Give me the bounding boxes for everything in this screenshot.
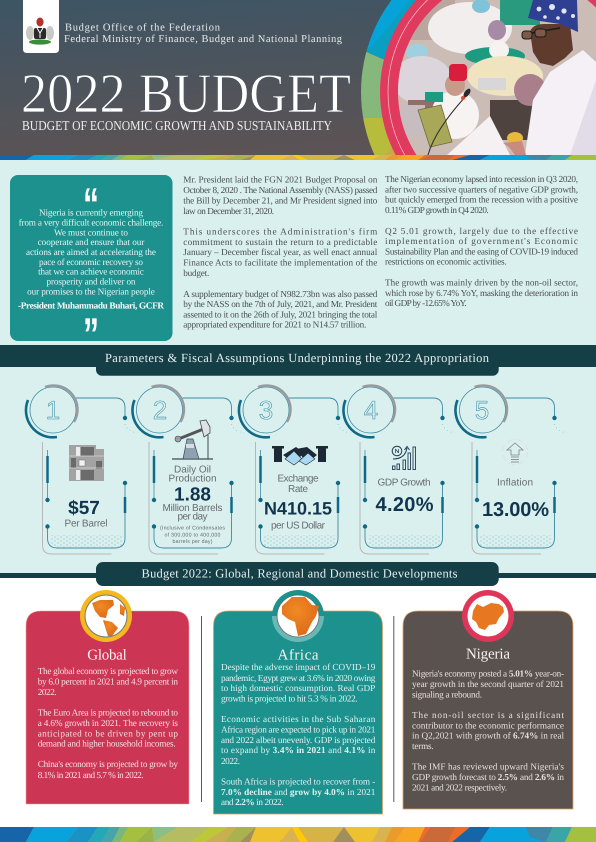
panel: nigeria: terms. — [412, 741, 434, 751]
panel: president quote: pace of economic recovery so — [39, 257, 143, 267]
section heading: developments: Budget 2022: Global, Regional and Domestic Developments — [142, 566, 458, 580]
parameter 3: exchange rate: N410.15 — [264, 498, 332, 518]
text column 1: A supplementary budget of N982.73bn was also passed — [183, 289, 378, 299]
panel: nigeria: in Q2,2021 with growth of 6.74% in real — [412, 731, 564, 741]
panel: nigeria: The IMF has reviewed upward Nigeria's — [412, 762, 564, 772]
panel: nigeria: signaling a rebound. — [412, 690, 482, 700]
title: 2022 BUDGET — [21, 63, 351, 125]
panel: nigeria: 2021 and 2022 respectively. — [412, 782, 507, 792]
panel: president quote: our promises to the Nigerian people — [27, 286, 155, 296]
panel: global: 8.1% in 2021 and 5.7 % in 2022. — [38, 770, 144, 780]
text column 1: the Bill by December 21, and Mr President signed into — [183, 196, 378, 206]
divider — [393, 616, 394, 802]
panel: nigeria: year growth in the second quarter of 2021 — [412, 679, 564, 689]
panel: africa: pandemic, Egypt grew at 3.6% in 2020 owing — [221, 673, 376, 683]
panel: global: The global economy is projected to grow — [38, 666, 178, 676]
subtitle: BUDGET OF ECONOMIC GROWTH AND SUSTAINABILITY — [22, 118, 332, 133]
panel: nigeria: contributor to the economic performance — [412, 720, 564, 730]
section heading: parameters — [0, 345, 596, 376]
organisation lines: Budget Office of the Federation — [65, 22, 221, 34]
panel: africa: Africa — [278, 648, 319, 664]
panel: president quote: “ — [83, 178, 99, 230]
multicolour stripe at bottom — [0, 827, 596, 842]
panel: president quote: prosperity and deliver on — [46, 276, 136, 286]
text column 1: This underscores the Administration's firm — [183, 226, 377, 236]
icon: growth bars — [392, 446, 416, 470]
panel: president quote: We must continue to — [54, 227, 128, 237]
icon: pump jack — [172, 420, 213, 459]
section heading: parameters: Parameters & Fiscal Assumptions Underpinning the 2022 Appropriation — [105, 351, 490, 365]
panel: president quote: cooperate and ensure that our — [38, 237, 144, 247]
text column 2: which rose by 6.74% YoY, masking the deterioration in — [385, 288, 578, 298]
panel: global: China's economy is projected to grow by — [38, 759, 178, 769]
parameter 5: inflation: 13.00% — [482, 499, 549, 521]
panel: global: by 6.0 percent in 2021 and 4.9 percent in — [38, 677, 178, 687]
panel: president quote: that we can achieve economic — [38, 266, 144, 276]
text column 2: but quickly emerged from the recession with a positive — [385, 195, 578, 205]
organisation lines — [64, 22, 343, 45]
panel: africa: South Africa is projected to recover from - — [221, 776, 375, 786]
panel: africa: and 2.2% in 2022. — [221, 797, 284, 807]
header banner — [0, 0, 596, 155]
text column 2: implementation of government's Economic — [385, 236, 578, 246]
panel: president quote: Nigeria is currently emerging — [39, 208, 143, 218]
text column 2: Q2 5.01 growth, largely due to the effective — [385, 226, 578, 236]
panel: president quote: -President Muhammadu Buhari, GCFR — [18, 301, 164, 311]
parameter 2: oil production: 1.88 — [174, 484, 211, 506]
logo box with coat of arms — [23, 0, 59, 53]
icon: globe africa — [272, 590, 324, 642]
parameter 1: oil price: Per Barrel — [64, 518, 108, 530]
panel: nigeria — [403, 590, 573, 809]
text column 2 — [385, 174, 578, 308]
parameter 2: oil production: Daily Oil — [174, 464, 211, 476]
parameter 2: oil production: barrels per day) — [172, 539, 213, 545]
parameter 3: exchange rate: Exchange — [278, 474, 319, 484]
parameter 4: GDP growth — [343, 385, 455, 554]
text column 1: assented to it on the 26th of July, 2021 bringing the total — [183, 310, 378, 320]
multicolour stripe under header — [0, 155, 596, 160]
text column 1 — [183, 175, 378, 330]
parameter 4: GDP growth: GDP Growth — [378, 478, 430, 488]
parameter 4: GDP growth: 4 — [364, 395, 378, 425]
panel: president quote — [10, 175, 172, 360]
parameter 2: oil production: of 300,000 to 400,000 — [164, 532, 221, 538]
parameter 2: oil production: per day — [178, 512, 208, 522]
panel: africa: to expand by 3.4% in 2021 and 4.1% in — [221, 745, 376, 755]
text column 1: Finance Acts to facilitate the implementation of the — [183, 258, 377, 268]
panel: africa: Africa region are expected to pick up in 2021 — [221, 725, 376, 735]
icon: inflation arrow — [502, 440, 528, 464]
parameter 2: oil production: (Inclusive of Condensates — [160, 526, 225, 532]
photo: president at the lectern — [390, 0, 596, 155]
text column 1: appropriated expenditure for 2021 to N14.57 trillion. — [183, 320, 366, 330]
panel: africa — [214, 590, 382, 814]
panel: global — [26, 590, 189, 804]
icon: handshake — [272, 446, 328, 465]
panel: africa: Despite the adverse impact of COVID–19 — [221, 662, 376, 672]
panel: global: Global — [87, 648, 127, 664]
parameter 1: oil price: $57 — [68, 498, 100, 519]
text column 2: Sustainability Plan and the easing of COVID-19 induced — [385, 246, 578, 256]
panel: president quote: ” — [83, 308, 99, 360]
panel: global: 2022. — [38, 687, 57, 697]
panel: africa: Economic activities in the Sub Saharan — [221, 714, 376, 724]
panel: africa: to high domestic consumption. Real GDP — [221, 683, 375, 693]
panel: nigeria: Nigeria's economy posted a 5.01% year-on- — [412, 669, 564, 679]
text column 2: restrictions on economic activities. — [385, 256, 507, 266]
parameter 5: inflation — [455, 385, 567, 554]
parameter 1: oil price — [26, 385, 138, 554]
parameter 2: oil production: Production — [168, 474, 216, 484]
icon: oil barrels — [69, 445, 104, 481]
parameter 3: exchange rate — [239, 385, 350, 554]
panel: global: The Euro Area is projected to rebound to — [38, 708, 178, 718]
parameter 3: exchange rate: 3 — [259, 395, 273, 425]
section heading: developments — [0, 562, 596, 586]
text column 1: budget. — [183, 268, 209, 278]
icon: map of nigeria — [462, 590, 514, 642]
organisation lines: Federal Ministry of Finance, Budget and National Planning — [64, 34, 343, 45]
parameter 1: oil price: 1 — [46, 395, 60, 425]
text column 2: after two successive quarters of negative GDP growth, — [385, 184, 578, 194]
parameter 4: GDP growth: 4.20% — [376, 494, 434, 516]
icon: globe americas — [80, 590, 132, 642]
panel: global: demand and higher household incomes. — [38, 738, 176, 748]
text column 2: The growth was mainly driven by the non-oil sector, — [385, 278, 578, 288]
panel: president quote: actions are aimed at accelerating the — [26, 247, 156, 257]
panel: africa: and 2022 albeit unevenly. GDP is projected — [221, 735, 376, 745]
panel: president quote: from a very difficult economic challenge. — [19, 218, 163, 228]
text column 2: oil GDP by -12.65% YoY. — [385, 298, 467, 308]
panel: africa: 7.0% decline and grow by 4.0% in 2021 — [221, 787, 376, 798]
text column 2: 0.11% GDP growth in Q4 2020. — [385, 205, 489, 215]
text column 2: The Nigerian economy lapsed into recession in Q3 2020, — [385, 174, 578, 184]
parameter 5: inflation: Inflation — [497, 478, 533, 488]
parameter 3: exchange rate: per US Dollar — [271, 520, 326, 532]
divider — [201, 616, 202, 802]
parameter 3: exchange rate: Rate — [288, 484, 308, 495]
text column 1: by the NASS on the 7th of July, 2021, and Mr. President — [183, 299, 378, 309]
panel: africa: 2022. — [221, 756, 240, 766]
panel: nigeria: GDP growth forecast to 2.5% and 2.6% in — [412, 772, 564, 782]
parameter 2: oil production — [132, 385, 244, 554]
panel: global: anticipated to be driven by pent up — [38, 728, 178, 738]
panel: nigeria: Nigeria — [466, 646, 510, 662]
text column 1: January – December fiscal year, as well enact annual — [183, 247, 378, 257]
text column 1: law on December 31, 2020. — [183, 206, 274, 216]
parameter 5: inflation: 5 — [475, 395, 489, 425]
pale panel background — [0, 160, 596, 573]
panel: global: a 4.6% growth in 2021. The recovery is — [38, 718, 178, 728]
text column 1: commitment to sustain the return to a predictable — [183, 237, 377, 247]
parameter 2: oil production: 2 — [153, 395, 167, 425]
text column 1: October 8, 2020 . The National Assembly (NASS) passed — [183, 185, 378, 195]
text column 1: Mr. President laid the FGN 2021 Budget Proposal on — [183, 175, 378, 185]
panel: nigeria: The non-oil sector is a significant — [412, 710, 564, 720]
panel: africa: growth is projected to hit 5.3 % in 2022. — [221, 694, 358, 704]
parameter 2: oil production: Million Barrels — [162, 503, 222, 514]
